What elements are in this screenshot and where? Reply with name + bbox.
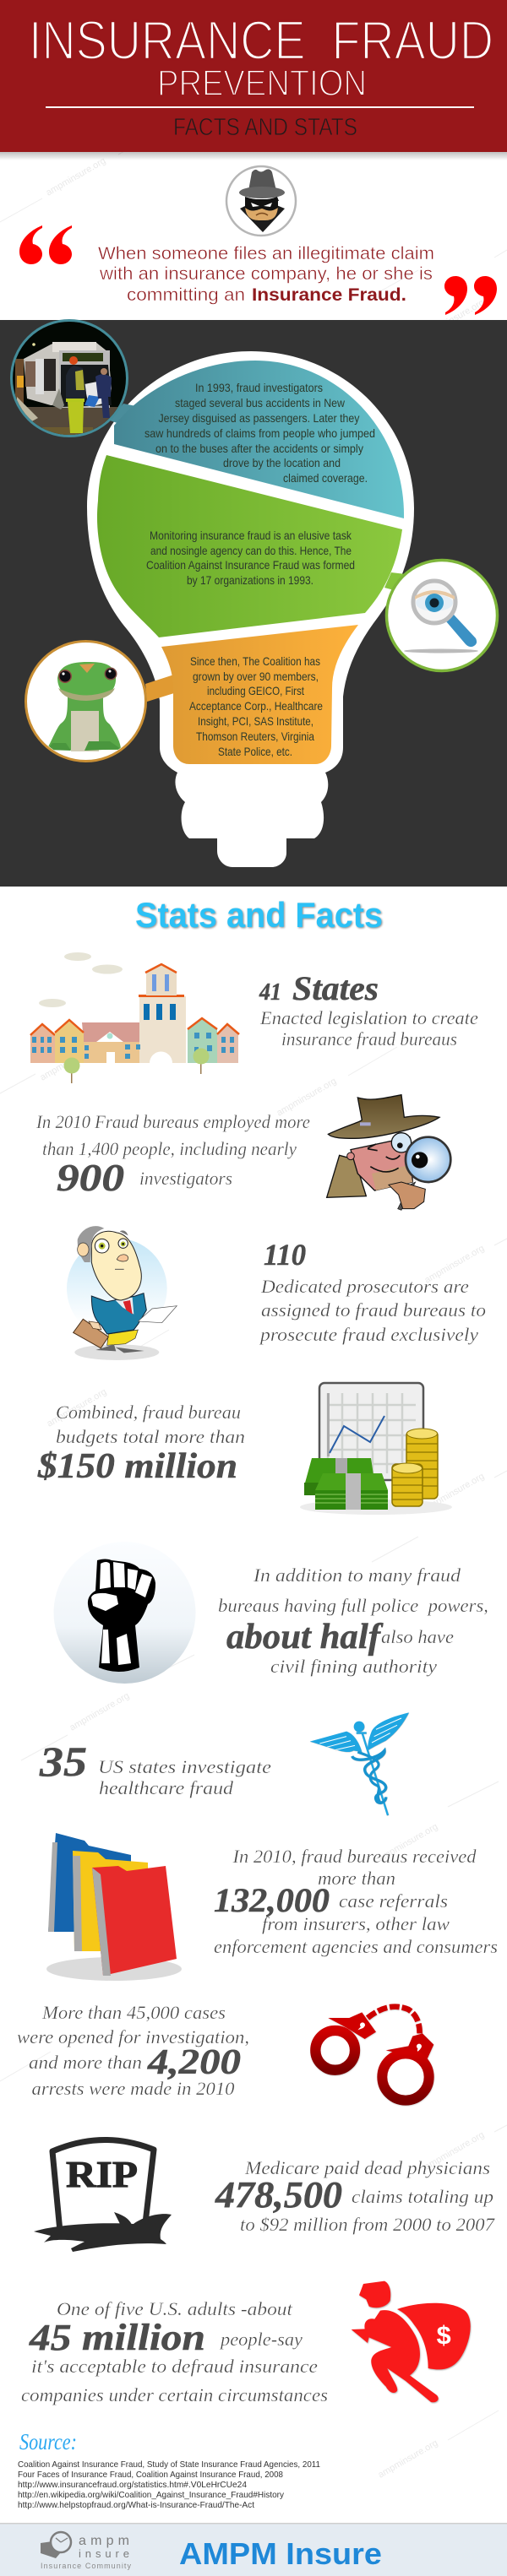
photo: bus accident	[11, 321, 129, 437]
stat: 41 states: insurance fraud bureaus	[281, 1028, 457, 1049]
logo: ampm insure: ampm	[79, 2534, 129, 2548]
icon: chart with money and coins	[300, 1383, 452, 1515]
stat: 35 us states: US states investigate	[98, 1756, 271, 1777]
icon: handcuffs	[315, 2007, 433, 2101]
icon: closing quote mark	[444, 276, 497, 315]
text block: teal	[144, 381, 375, 485]
stat: 4,200 arrests: 4,200	[147, 2043, 241, 2082]
stat: 478,500 claims: 478,500	[215, 2174, 342, 2215]
stat: 478,500 claims: to $92 million from 2000 to 2007	[240, 2214, 495, 2235]
stat: 478,500 claims	[215, 2157, 495, 2235]
panel: footer	[0, 2523, 507, 2576]
stat: 45 million adults: it's acceptable to defraud insurance	[31, 2356, 318, 2377]
panel: dark background	[0, 320, 507, 887]
sources	[18, 2429, 320, 2510]
stat: 900 investigators	[35, 1111, 310, 1199]
stat: 4,200 arrests: were opened for investigation,	[17, 2026, 249, 2047]
stat: $150 million	[37, 1402, 245, 1486]
stat: 45 million adults: companies under certain circumstances	[21, 2384, 328, 2405]
stat: 132,000 case referrals: from insurers, other law	[262, 1913, 450, 1934]
stat: 478,500 claims: claims totaling up	[352, 2186, 493, 2207]
text block: teal: saw hundreds of claims from people who jumped	[144, 426, 375, 440]
stat: 41 states: States	[292, 969, 379, 1007]
watermarks: ampminsure.org	[422, 2129, 486, 2172]
stat: 4,200 arrests: and more than	[29, 2052, 142, 2073]
bulb section: teal	[114, 361, 404, 518]
stat: about half: In addition to many fraud	[253, 1565, 461, 1586]
subtitle: PREVENTION	[157, 62, 367, 104]
stat: 110 prosecutors: 110	[264, 1238, 306, 1272]
stat: 35 us states: 35	[39, 1738, 87, 1785]
icon: caduceus	[310, 1712, 409, 1815]
icon: detective with magnifier	[327, 1095, 450, 1210]
text block: teal: claimed coverage.	[283, 471, 368, 485]
quote text: When someone files an illegitimate claim	[98, 244, 434, 263]
stat: 478,500 claims: Medicare paid dead physicians	[244, 2157, 490, 2178]
quote text: with an insurance company, he or she is	[99, 264, 433, 284]
stat: 900 investigators: than 1,400 people, including nearly	[42, 1138, 297, 1159]
logo: ampm insure: insure	[79, 2547, 129, 2560]
sources: http://www.helpstopfraud.org/What-is-Insurance-Fraud/The-Act	[18, 2500, 254, 2510]
watermarks: ampminsure.org	[44, 155, 107, 198]
photo: magnifying glass with eye	[387, 561, 497, 670]
watermarks: ampminsure.org	[377, 1821, 439, 1864]
stat: 45 million adults: One of five U.S. adults -about	[57, 2298, 293, 2319]
watermarks: ampminsure.org	[422, 1471, 486, 1514]
sources: http://www.insurancefraud.org/statistics.htm#.V0LeHrCUe24	[18, 2480, 247, 2490]
photo: gecko	[25, 642, 145, 762]
stat: 45 million adults: people-say	[219, 2329, 303, 2350]
stat: 41 states	[259, 969, 478, 1049]
stat: about half: also have	[381, 1626, 454, 1647]
watermarks: ampminsure.org	[46, 1386, 108, 1429]
tagline: FACTS AND STATS	[173, 114, 357, 141]
icon: robber with money bag: $	[437, 2321, 451, 2350]
icon: RIP gravestone	[34, 2139, 172, 2252]
text block: green	[146, 529, 355, 587]
logo: ampm insure	[41, 2532, 132, 2570]
stat: 110 prosecutors: Dedicated prosecutors are	[260, 1276, 469, 1297]
stat: 41 states: Enacted legislation to create	[259, 1007, 478, 1028]
icon: robber with money bag	[352, 2281, 471, 2402]
icon: RIP gravestone: RIP	[66, 2154, 138, 2195]
icon: stacked folders	[46, 1833, 182, 1981]
stat: 110 prosecutors	[259, 1238, 486, 1345]
stat: 132,000 case referrals: more than	[318, 1868, 395, 1889]
connector: bus	[110, 404, 140, 426]
text block: teal: Jersey disguised as passengers. Later they	[159, 411, 360, 425]
stat: about half	[218, 1565, 488, 1677]
stat: 900 investigators: investigators	[139, 1168, 232, 1189]
text block: teal: on to the buses after the accidents or simply	[155, 442, 363, 455]
watermarks: ampminsure.org	[275, 1076, 338, 1119]
stat: about half: about half	[226, 1618, 384, 1657]
text block: orange: grown by over 90 members,	[193, 670, 319, 683]
icon: masked spy	[226, 166, 296, 236]
text block: orange: Since then, The Coalition has	[190, 654, 320, 668]
stat: 900 investigators: 900	[57, 1156, 124, 1199]
stat: $150 million: budgets total more than	[56, 1426, 245, 1447]
icon: raised fist	[54, 1542, 196, 1684]
text block: orange	[189, 654, 323, 758]
bulb section: green	[97, 455, 402, 637]
sources: Coalition Against Insurance Fraud, Study of State Insurance Fraud Agencies, 2011	[18, 2459, 320, 2470]
stat: 35 us states: healthcare fraud	[99, 1777, 234, 1798]
text block: green: by 17 organizations in 1993.	[187, 573, 313, 587]
stat: $150 million: Combined, fraud bureau	[56, 1402, 241, 1423]
text block: orange: State Police, etc.	[218, 745, 292, 758]
watermarks: ampminsure.org	[422, 1243, 486, 1286]
icon: opening quote mark	[19, 225, 72, 264]
text block: orange: Acceptance Corp., Healthcare	[189, 699, 323, 713]
stat: 4,200 arrests: arrests were made in 2010	[32, 2078, 235, 2099]
watermarks: ampminsure.org	[39, 1040, 101, 1083]
bulb section: orange	[161, 625, 358, 764]
stat: 900 investigators: In 2010 Fraud bureaus employed more	[35, 1111, 310, 1132]
sources: Four Faces of Insurance Fraud, Coalition Against Insurance Fraud, 2008	[18, 2470, 283, 2480]
source heading: Source:	[19, 2429, 77, 2454]
bulb white outline	[87, 351, 414, 867]
quote text: Insurance Fraud.	[252, 285, 406, 305]
watermarks: ampminsure.org	[68, 1690, 131, 1733]
stat: about half: bureaus having full police powers,	[218, 1595, 488, 1616]
text block: green: Monitoring insurance fraud is an elusive task	[150, 529, 352, 542]
connector: magnifier	[384, 572, 406, 591]
connector: gecko	[145, 675, 174, 702]
stat: 132,000 case referrals	[214, 1846, 498, 1957]
quote text: committing an	[127, 285, 245, 305]
stat: 4,200 arrests: More than 45,000 cases	[41, 2002, 226, 2023]
stat: 45 million adults: 45 million	[29, 2317, 205, 2358]
light bulb graphic	[87, 351, 414, 867]
icon: town buildings	[30, 952, 239, 1083]
stat: 110 prosecutors: assigned to fraud bureaus to	[261, 1299, 486, 1321]
text block: orange: Thomson Reuters, Virginia	[196, 729, 314, 743]
stat: 110 prosecutors: prosecute fraud exclusively	[259, 1324, 478, 1345]
stat: 132,000 case referrals: In 2010, fraud bureaus received	[232, 1846, 477, 1867]
stat: 4,200 arrests	[17, 2002, 249, 2099]
watermarks: ampminsure.org	[422, 297, 486, 340]
watermarks: ampminsure.org	[377, 2438, 439, 2481]
stat: 132,000 case referrals: enforcement agencies and consumers	[214, 1936, 498, 1957]
quote text	[98, 244, 434, 305]
stat: $150 million: $150 million	[37, 1447, 237, 1486]
stat: 132,000 case referrals: 132,000	[214, 1881, 330, 1919]
text block: green: Coalition Against Insurance Fraud was formed	[146, 558, 355, 572]
brand name: AMPM Insure	[179, 2536, 382, 2571]
stat: 45 million adults	[21, 2298, 328, 2405]
text block: orange: including GEICO, First	[207, 684, 304, 697]
logo: ampm insure: Insurance Community	[41, 2562, 132, 2570]
stat: 35 us states	[39, 1738, 271, 1798]
icon: lawyer with briefcase	[67, 1226, 177, 1360]
sources: http://en.wikipedia.org/wiki/Coalition_Against_Insurance_Fraud#History	[18, 2490, 285, 2500]
text block: green: and nosingle agency can do this. Hence, The	[150, 544, 352, 557]
stat: 132,000 case referrals: case referrals	[339, 1890, 448, 1912]
text block: teal: staged several bus accidents in New	[175, 396, 346, 409]
heading: stats and facts: Stats and Facts	[135, 895, 383, 935]
stat: 41 states: 41	[259, 979, 281, 1006]
text block: orange: Insight, PCI, SAS Institute,	[198, 714, 313, 728]
stat: about half: civil fining authority	[270, 1656, 437, 1677]
panel: header	[0, 0, 507, 160]
text block: teal: drove by the location and	[223, 456, 341, 469]
text block: teal: In 1993, fraud investigators	[195, 381, 323, 394]
